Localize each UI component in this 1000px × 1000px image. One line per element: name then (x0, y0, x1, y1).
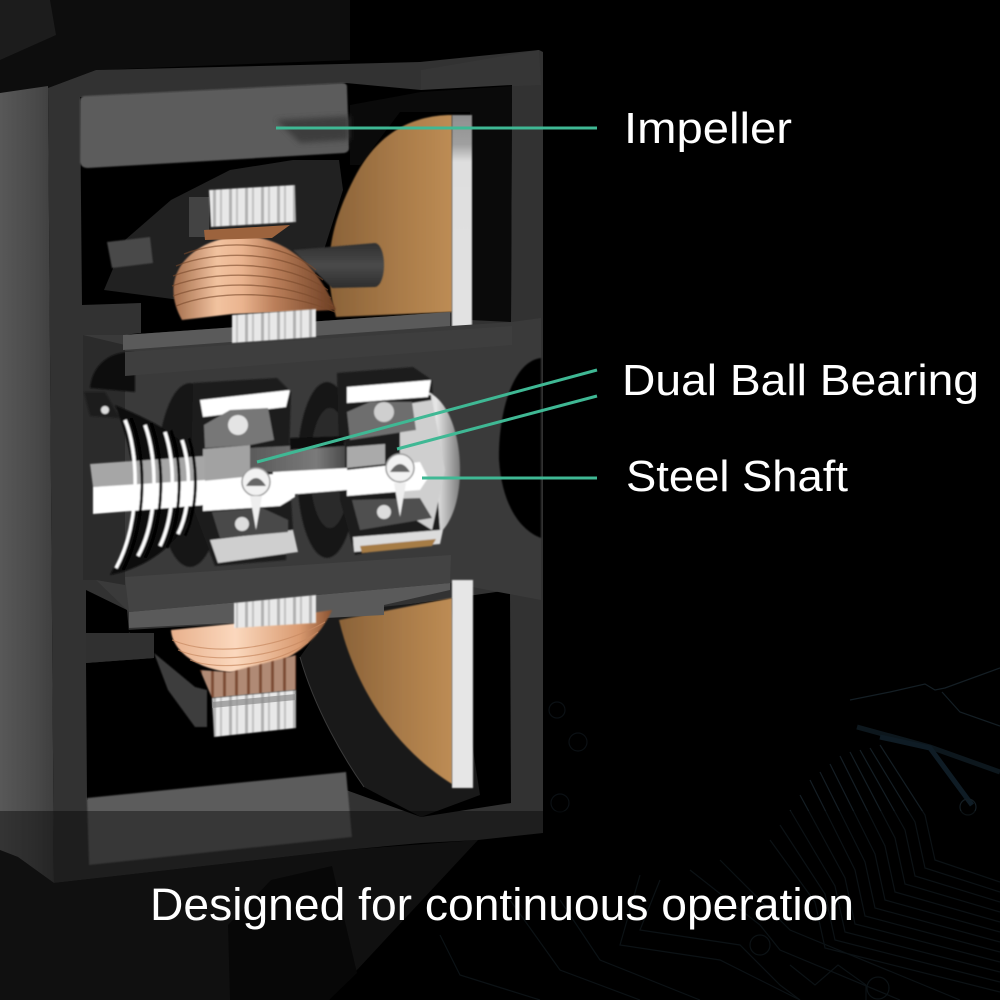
bottom teeth upper (234, 595, 316, 628)
spring shadow (110, 405, 200, 575)
bay left shade (83, 335, 125, 585)
stub grey (90, 456, 205, 487)
top tan disc (329, 115, 452, 317)
steel shaft (90, 436, 428, 514)
bottom copper windings (172, 622, 325, 666)
right race grey (347, 444, 385, 468)
left lower ball (235, 517, 249, 531)
lower fan wedge (228, 866, 357, 1000)
right bearing end plate (400, 390, 460, 540)
right race lower (352, 498, 432, 530)
bottom impeller blade (87, 772, 352, 865)
central plate bottom (129, 583, 450, 628)
left bearing seal (157, 383, 223, 567)
bottom caption band (0, 811, 1000, 1000)
left bearing inner cavity (200, 405, 293, 540)
stator tab (107, 237, 153, 268)
bottom teeth of top coil (232, 309, 316, 343)
frame top right shade (421, 50, 541, 90)
right bearing outer top (337, 367, 440, 555)
bottom stator arm (154, 653, 207, 727)
cage spokes (250, 496, 262, 530)
upper-left shroud (0, 0, 56, 60)
bay lower light band (125, 555, 451, 612)
dual ball bearing assembly (84, 367, 460, 575)
top coil stator arm (104, 160, 343, 312)
teeth shadow line (212, 694, 296, 708)
top winding teeth (209, 185, 296, 227)
spring dark stripes (123, 418, 195, 570)
label: dual ball bearing: Dual Ball Bearing (622, 356, 979, 405)
label: steel shaft: Steel Shaft (626, 452, 848, 501)
shaft spring (116, 420, 188, 568)
blade outline (300, 657, 364, 787)
arc behind disc (350, 86, 512, 322)
bottom copper coil (171, 610, 332, 672)
right race upper ball (374, 402, 394, 422)
impeller shadow (276, 116, 349, 143)
left ball (242, 468, 270, 496)
right ball (386, 454, 414, 482)
top plate upper band (125, 326, 512, 376)
right bearing seal (297, 382, 357, 558)
bottom chamber (86, 590, 511, 817)
leader line: impeller (276, 126, 597, 130)
caption: Designed for continuous operation (150, 879, 854, 930)
divider (86, 633, 154, 663)
shaft dark top (250, 443, 345, 472)
top white strip (452, 115, 472, 327)
left cage highlights (204, 408, 274, 448)
bottom curved blade (300, 600, 480, 817)
top copper windings (172, 245, 335, 312)
left bearing outer top (190, 378, 291, 566)
left strip bottom (210, 530, 298, 563)
label: impeller: Impeller (624, 104, 792, 153)
stub white (93, 480, 205, 514)
bottom white strip (452, 580, 473, 788)
leader line: steel shaft (422, 476, 597, 480)
top plate lip (123, 312, 450, 350)
right cage highlights (347, 402, 416, 440)
housing left wall (0, 86, 54, 883)
top copper coil (173, 236, 336, 320)
left race upper ball (228, 415, 248, 435)
housing frame (48, 50, 543, 883)
right seal inner (310, 408, 350, 528)
dark recess right (499, 358, 541, 538)
top coil leads (204, 225, 290, 240)
left race grey (203, 445, 250, 482)
dark upper-left fan body (0, 0, 350, 93)
leader line: dual ball bearing right (397, 396, 597, 449)
middle white (273, 468, 347, 496)
top impeller blade (80, 83, 349, 168)
tan sliver (360, 539, 436, 553)
spring end (84, 392, 120, 418)
right inner plate (400, 400, 445, 530)
right strip top (347, 380, 431, 403)
left race white (203, 472, 295, 511)
left race lower (212, 508, 288, 538)
top arc recess (90, 352, 135, 392)
stator post (189, 197, 209, 237)
central bay (83, 318, 541, 612)
bottom tan disc (339, 598, 452, 784)
circuit board pattern (440, 668, 1000, 1000)
lower-left fan body (0, 840, 478, 1000)
left strip top (200, 390, 290, 417)
top recess below plate (86, 590, 129, 633)
bottom winding leads (200, 655, 296, 698)
right race white (347, 462, 428, 496)
top rod (293, 243, 384, 288)
fan housing cross-section (0, 50, 543, 883)
leader line: dual ball bearing left (257, 370, 597, 462)
right strip bottom (353, 530, 443, 552)
right lower ball (377, 505, 391, 519)
right bearing inner cavity (347, 395, 440, 537)
top chamber (80, 83, 512, 335)
bottom winding teeth (212, 690, 296, 737)
